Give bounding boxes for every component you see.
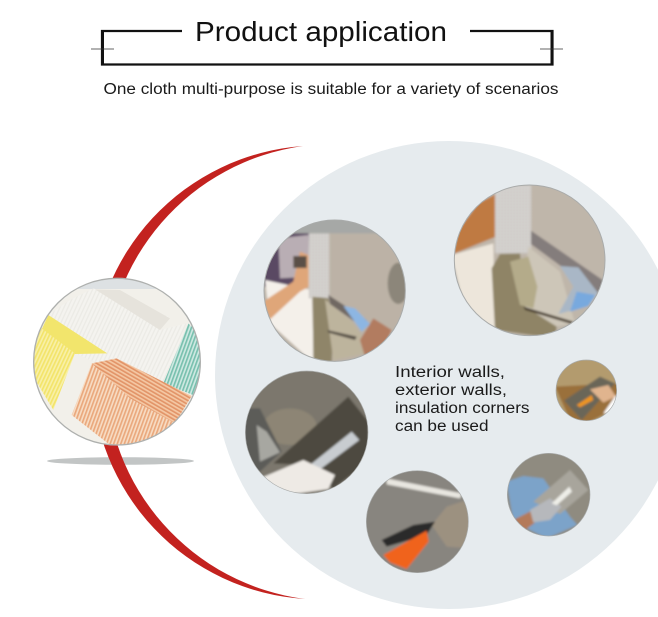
usage text: Interior walls, <box>395 364 505 381</box>
photo: orange glove and trowel <box>363 468 472 575</box>
usage text: can be used <box>395 418 488 435</box>
title: Product application <box>195 16 447 47</box>
photo: plastering corner with hands <box>260 217 410 367</box>
usage text <box>395 364 530 435</box>
photo: trowel with white glove <box>243 368 370 497</box>
subtitle: One cloth multi-purpose is suitable for a variety of scenarios <box>104 81 559 98</box>
usage text: exterior walls, <box>395 382 507 399</box>
product photo circle <box>30 275 207 452</box>
photo: blue wall plastering <box>505 452 593 538</box>
title frame <box>91 31 563 64</box>
red crescent arc <box>92 146 305 599</box>
photo: trowel with orange handle <box>555 358 618 422</box>
usage text: insulation corners <box>395 400 530 417</box>
large pale circle panel <box>215 141 658 609</box>
product shadow <box>47 457 194 465</box>
photo: mesh corner and mortar <box>452 182 612 342</box>
